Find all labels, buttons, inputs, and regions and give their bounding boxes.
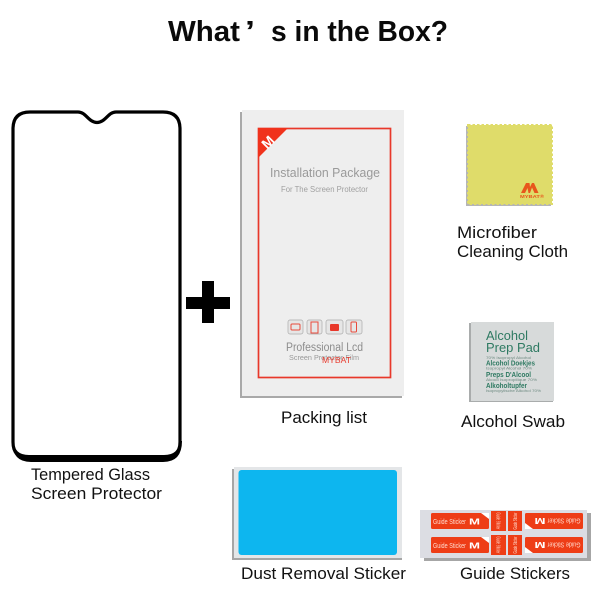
icon: guide stickers: M — [469, 518, 481, 526]
brand corner: M — [258, 132, 278, 152]
text: screen protector film: Screen Protector Film — [289, 353, 359, 362]
icon: plus sign — [186, 281, 230, 323]
text: professional lcd: Professional Lcd — [286, 342, 363, 354]
icon: guide stickers: M — [534, 516, 546, 525]
icon: alcohol swab — [469, 322, 554, 402]
icon: guide stickers: Guide Sticker — [494, 536, 500, 554]
icon: guide stickers: Guide Sticker — [433, 543, 467, 550]
icon: microfiber cloth — [466, 125, 552, 206]
title: s in the Box? — [271, 16, 448, 48]
label: tempered glass: Screen Protector — [31, 484, 162, 503]
icon: guide stickers: M — [534, 540, 546, 549]
red frame — [258, 128, 390, 378]
cloth logo: MYBAT® — [520, 193, 545, 199]
icon: guide stickers — [420, 510, 591, 561]
icon: alcohol swab: Preps D'Alcool — [486, 372, 531, 379]
icon: alcohol swab: Isopropyl Alcohol 70% — [486, 366, 533, 370]
icon: alcohol swab: Alcohol — [486, 328, 528, 343]
brand corner — [258, 128, 288, 158]
label: alcohol swab: Alcohol Swab — [461, 412, 565, 431]
title — [168, 16, 448, 48]
icon: alcohol swab: 70% Isopropyl Alcohol — [486, 355, 531, 360]
device icons — [288, 320, 362, 334]
icon: guide stickers: Guide Sticker — [547, 516, 580, 524]
icon: guide stickers: Guide Sticker — [513, 536, 519, 554]
icon: alcohol swab: Alcohol Doekjes — [486, 360, 535, 368]
icon: alcohol swab: Isopropylische Alkohol 70% — [486, 388, 541, 393]
label: tempered glass: Tempered Glass — [31, 465, 150, 484]
icon: alcohol swab: Alcool Isopropilique 70% — [486, 377, 538, 382]
heading: installation package: Installation Package — [270, 166, 380, 180]
icon: dust removal sticker — [232, 467, 402, 560]
label: guide stickers: Guide Stickers — [460, 564, 570, 583]
icon: guide stickers: Guide Sticker — [433, 519, 467, 526]
label: microfiber cleaning cloth: Cleaning Cloth — [457, 242, 568, 261]
text: mybat: MYBAT — [322, 356, 351, 365]
label: dust removal sticker: Dust Removal Sticker — [241, 564, 406, 583]
title: What — [168, 16, 240, 48]
label: packing list: Packing list — [281, 408, 367, 427]
icon: alcohol swab: Alkoholtupfer — [486, 383, 527, 390]
panel: packing list card — [240, 110, 404, 398]
label: microfiber cleaning cloth — [457, 223, 568, 261]
label: tempered glass — [31, 465, 162, 503]
subheading: for the screen protector: For The Screen Protector — [281, 185, 368, 194]
icon: guide stickers: Guide Sticker — [547, 540, 580, 548]
icon: tempered glass screen protector — [12, 112, 182, 462]
label: microfiber cleaning cloth: Microfiber — [457, 223, 537, 242]
title: ’ — [245, 16, 255, 48]
icon: guide stickers: Guide Sticker — [513, 512, 519, 530]
icon: guide stickers: Guide Sticker — [494, 512, 500, 530]
icon: guide stickers: M — [469, 542, 481, 550]
icon: alcohol swab: Prep Pad — [486, 340, 540, 355]
